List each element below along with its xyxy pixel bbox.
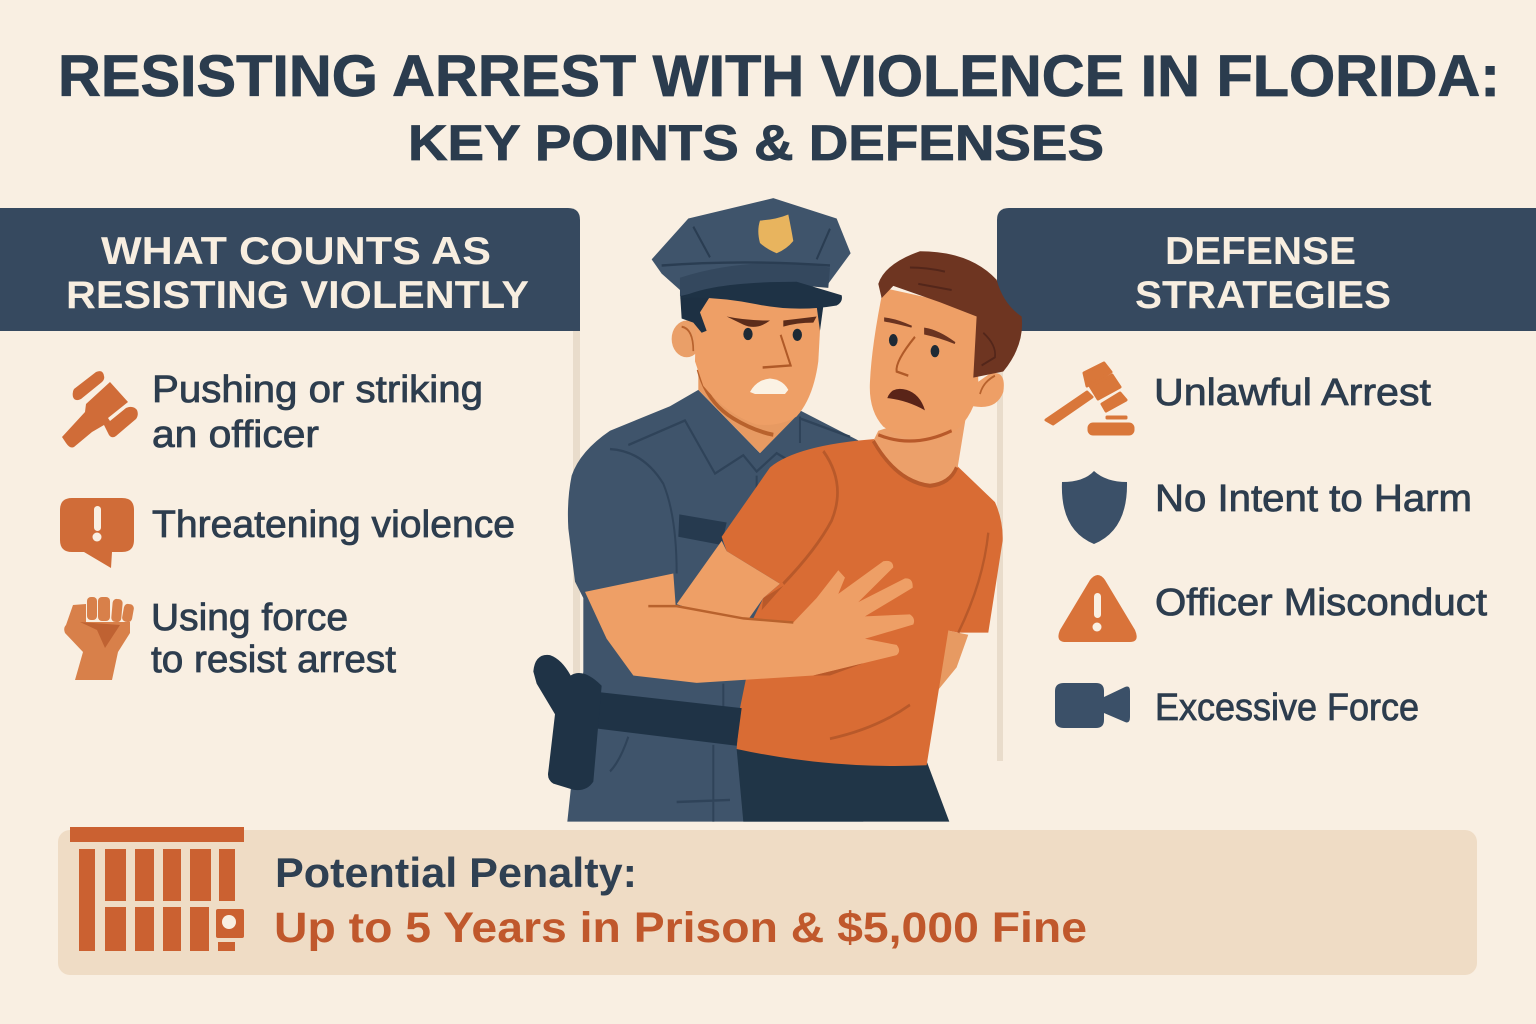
title: KEY POINTS & DEFENSES [408, 115, 1104, 171]
suspect shirt [722, 439, 1003, 766]
penalty text: Up to 5 Years in Prison & $5,000 Fine [274, 904, 1087, 952]
text: using force: to resist arrest [151, 639, 396, 681]
uniform details [610, 416, 850, 822]
icon: gavel [1046, 363, 1133, 434]
officer belt and holster [533, 655, 742, 790]
officer cap [652, 198, 851, 309]
officer neck [698, 365, 803, 453]
central illustration: officer restraining man [533, 198, 1022, 822]
text: officer misconduct: Officer Misconduct [1155, 582, 1487, 624]
text: threatening violence: Threatening violence [152, 504, 515, 546]
text: pushing or striking [152, 369, 483, 456]
text: excessive force: Excessive Force [1155, 687, 1419, 729]
text: pushing or striking: Pushing or striking [152, 369, 483, 411]
left panel header: WHAT COUNTS AS [101, 230, 491, 273]
icon: warning triangle [1058, 575, 1137, 642]
right panel header: DEFENSE [1165, 230, 1356, 273]
left panel header: RESISTING VIOLENTLY [66, 274, 529, 317]
text: pushing or striking: an officer [152, 414, 319, 456]
right panel header: STRATEGIES [1135, 274, 1391, 317]
penalty text: Potential Penalty: [275, 849, 637, 896]
icon: striking hand [62, 371, 138, 448]
panel: what counts as resisting violently [0, 208, 580, 681]
icon: prison bars [70, 827, 244, 951]
icon: shield [1062, 471, 1127, 544]
suspect trousers [737, 749, 949, 822]
panel: potential penalty [58, 827, 1477, 975]
panel: defense strategies [997, 208, 1536, 729]
text: no intent to harm: No Intent to Harm [1155, 478, 1472, 520]
text: using force [151, 597, 396, 681]
divider strokes [573, 331, 580, 731]
penalty text [274, 849, 1087, 952]
suspect head [870, 251, 1022, 441]
title: RESISTING ARREST WITH VIOLENCE IN FLORIDA: [58, 44, 1500, 109]
officer arm and hand [585, 541, 914, 683]
icon: raised fist [64, 597, 134, 680]
officer head [672, 292, 823, 425]
left panel header [0, 208, 580, 331]
suspect far arm [930, 631, 968, 696]
right panel header [997, 208, 1536, 331]
icon: video camera [1055, 683, 1130, 728]
suspect neck [873, 402, 968, 486]
text: unlawful arrest: Unlawful Arrest [1154, 372, 1431, 414]
title [58, 44, 1500, 171]
text: using force: Using force [151, 597, 348, 639]
icon: speech bubble warning [60, 498, 134, 568]
officer uniform [567, 390, 863, 822]
